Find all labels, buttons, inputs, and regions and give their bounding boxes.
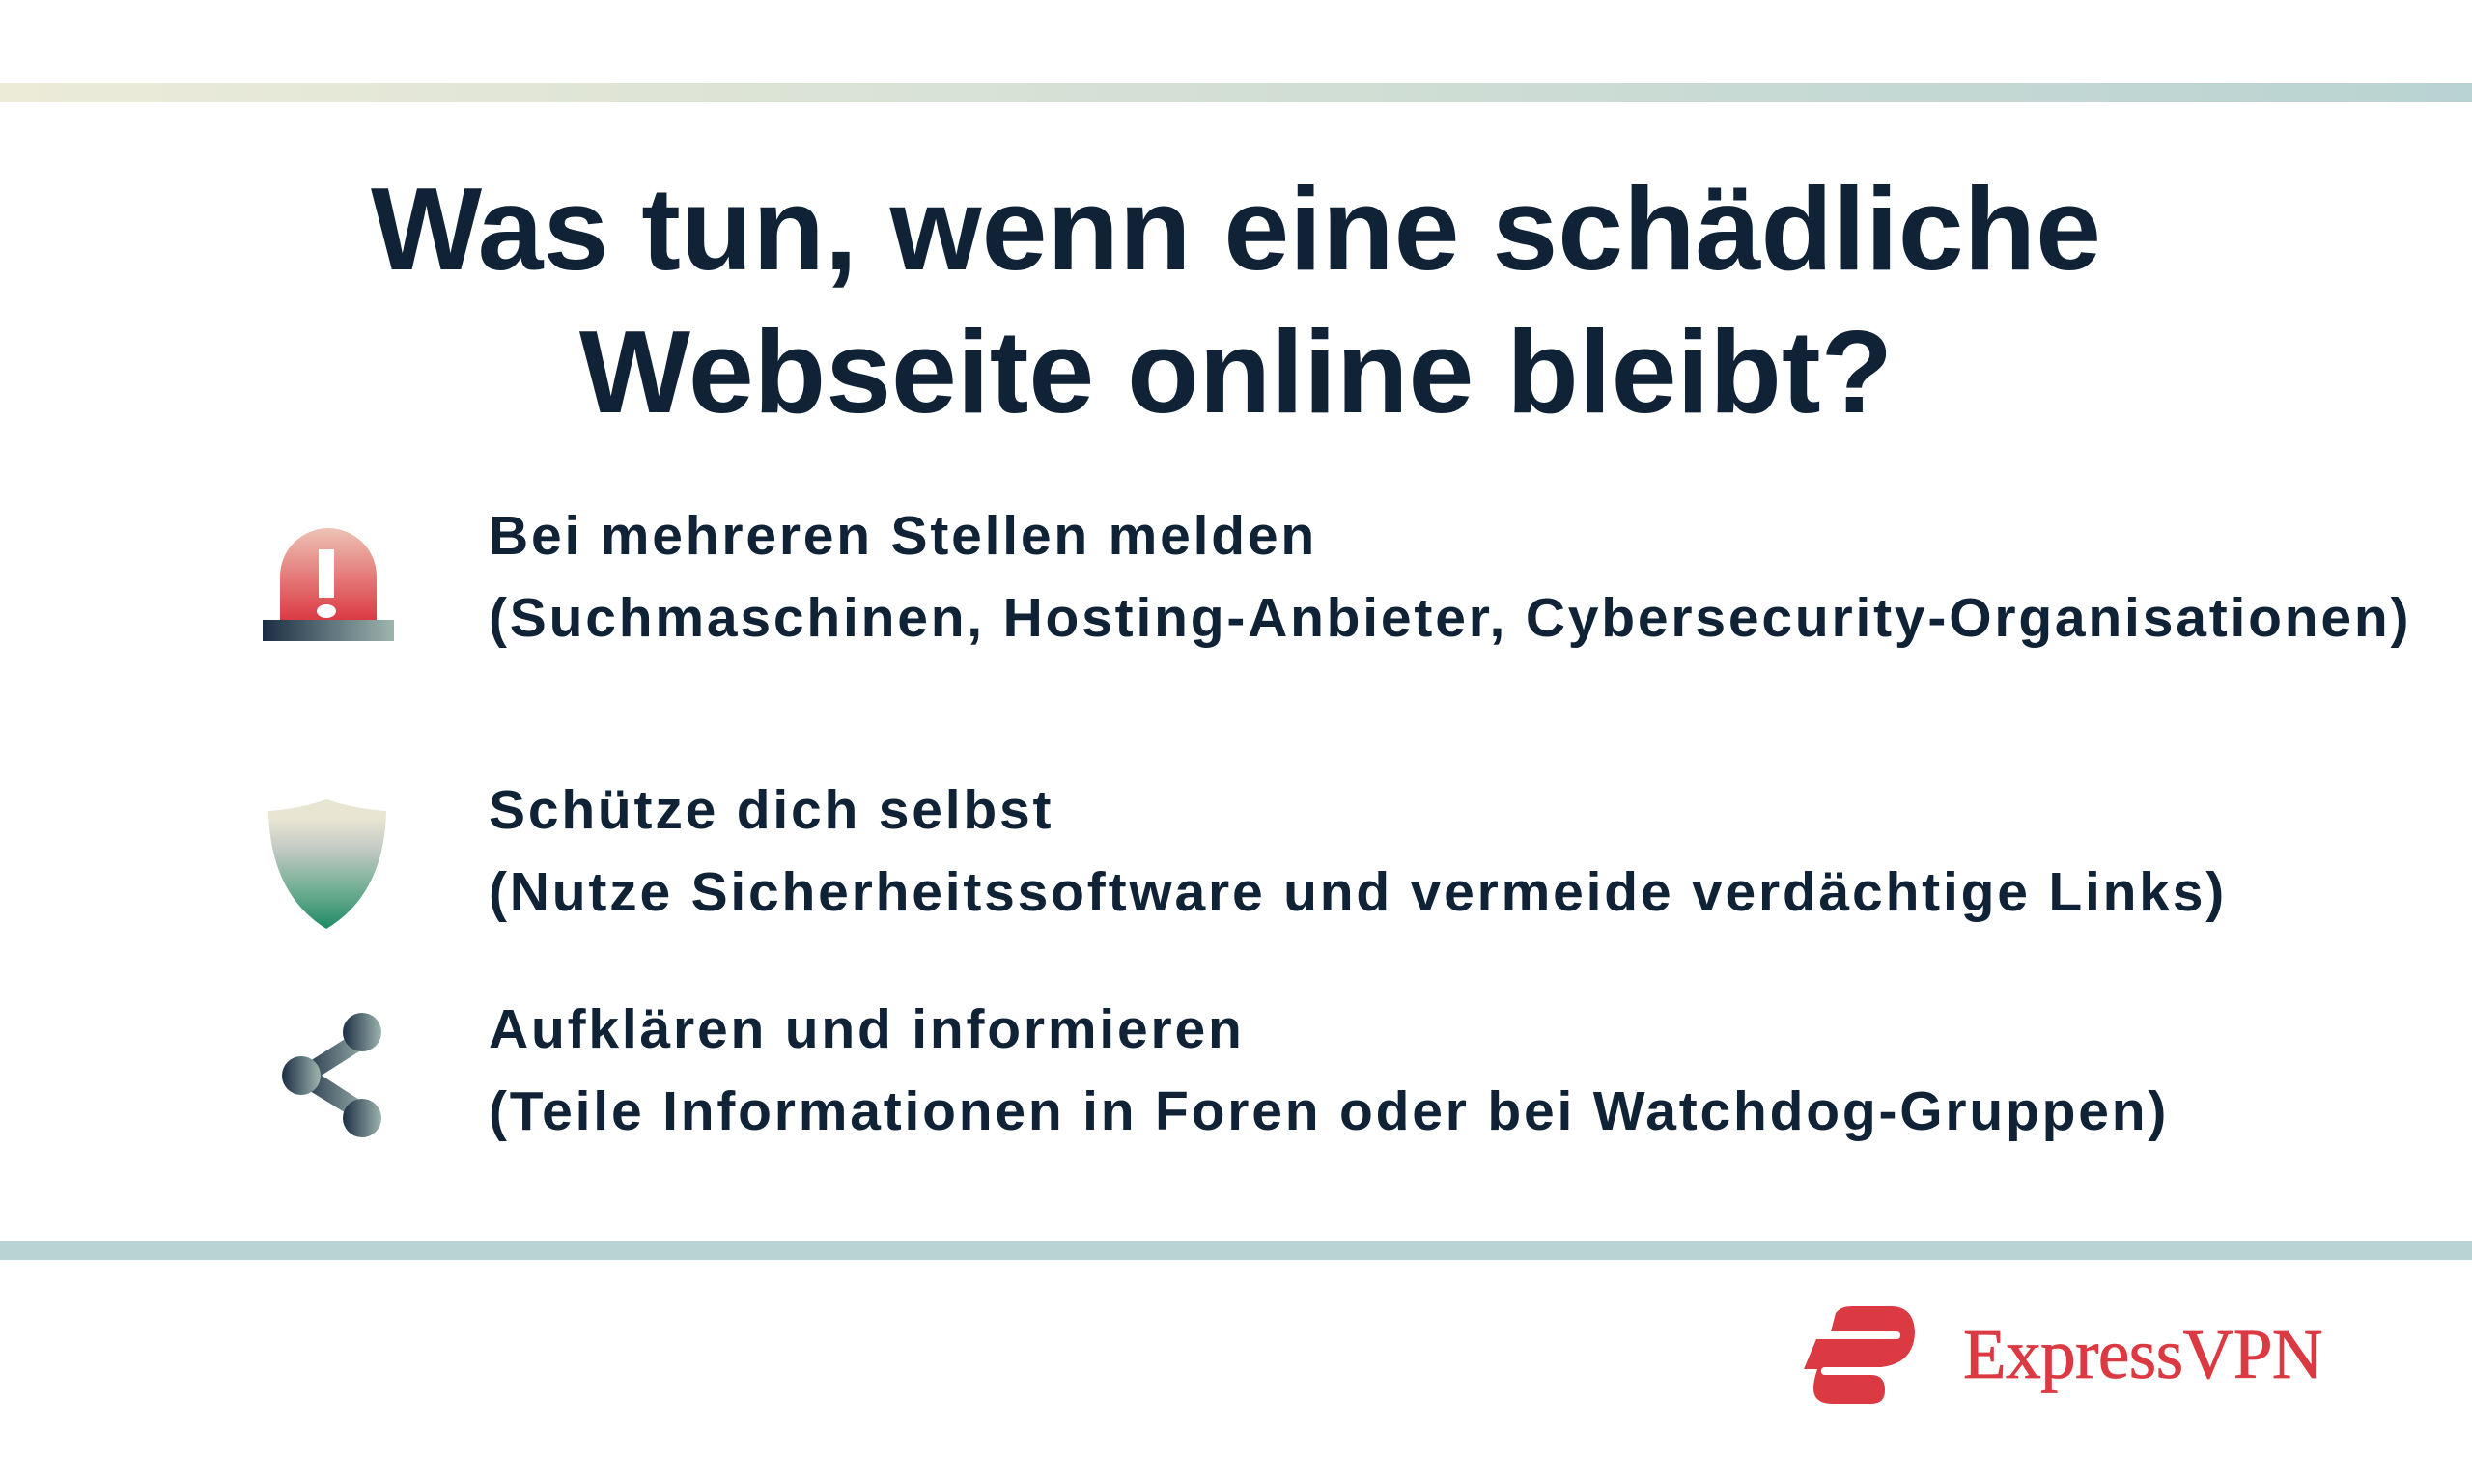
- item 3 text: [489, 998, 2169, 1142]
- item 2 text: (Nutze Sicherheitssoftware und vermeide verdächtige Links): [489, 861, 2227, 923]
- item 3 text: Aufklären und informieren: [489, 998, 1245, 1060]
- item 1 text: [489, 505, 2411, 649]
- top gradient bar: [0, 83, 2472, 102]
- bottom bar: [0, 1241, 2472, 1260]
- item 1 text: Bei mehreren Stellen melden: [489, 505, 1317, 567]
- item 2 text: [489, 779, 2227, 923]
- logo: ExpressVPN: ExpressVPN: [1963, 1315, 2322, 1393]
- item 2 text: Schütze dich selbst: [489, 779, 1053, 841]
- title: [371, 163, 2101, 437]
- item 1 text: (Suchmaschinen, Hosting-Anbieter, Cybersecurity-Organisationen): [489, 587, 2411, 649]
- item 3 text: (Teile Informationen in Foren oder bei Watchdog-Gruppen): [489, 1080, 2169, 1142]
- icon: siren: [263, 528, 394, 641]
- logo: ExpressVPN: [1804, 1306, 2322, 1404]
- icon: share: [282, 1013, 381, 1137]
- icon: shield: [268, 799, 386, 929]
- title: Webseite online bleibt?: [579, 306, 1893, 437]
- title: Was tun, wenn eine schädliche: [371, 163, 2101, 294]
